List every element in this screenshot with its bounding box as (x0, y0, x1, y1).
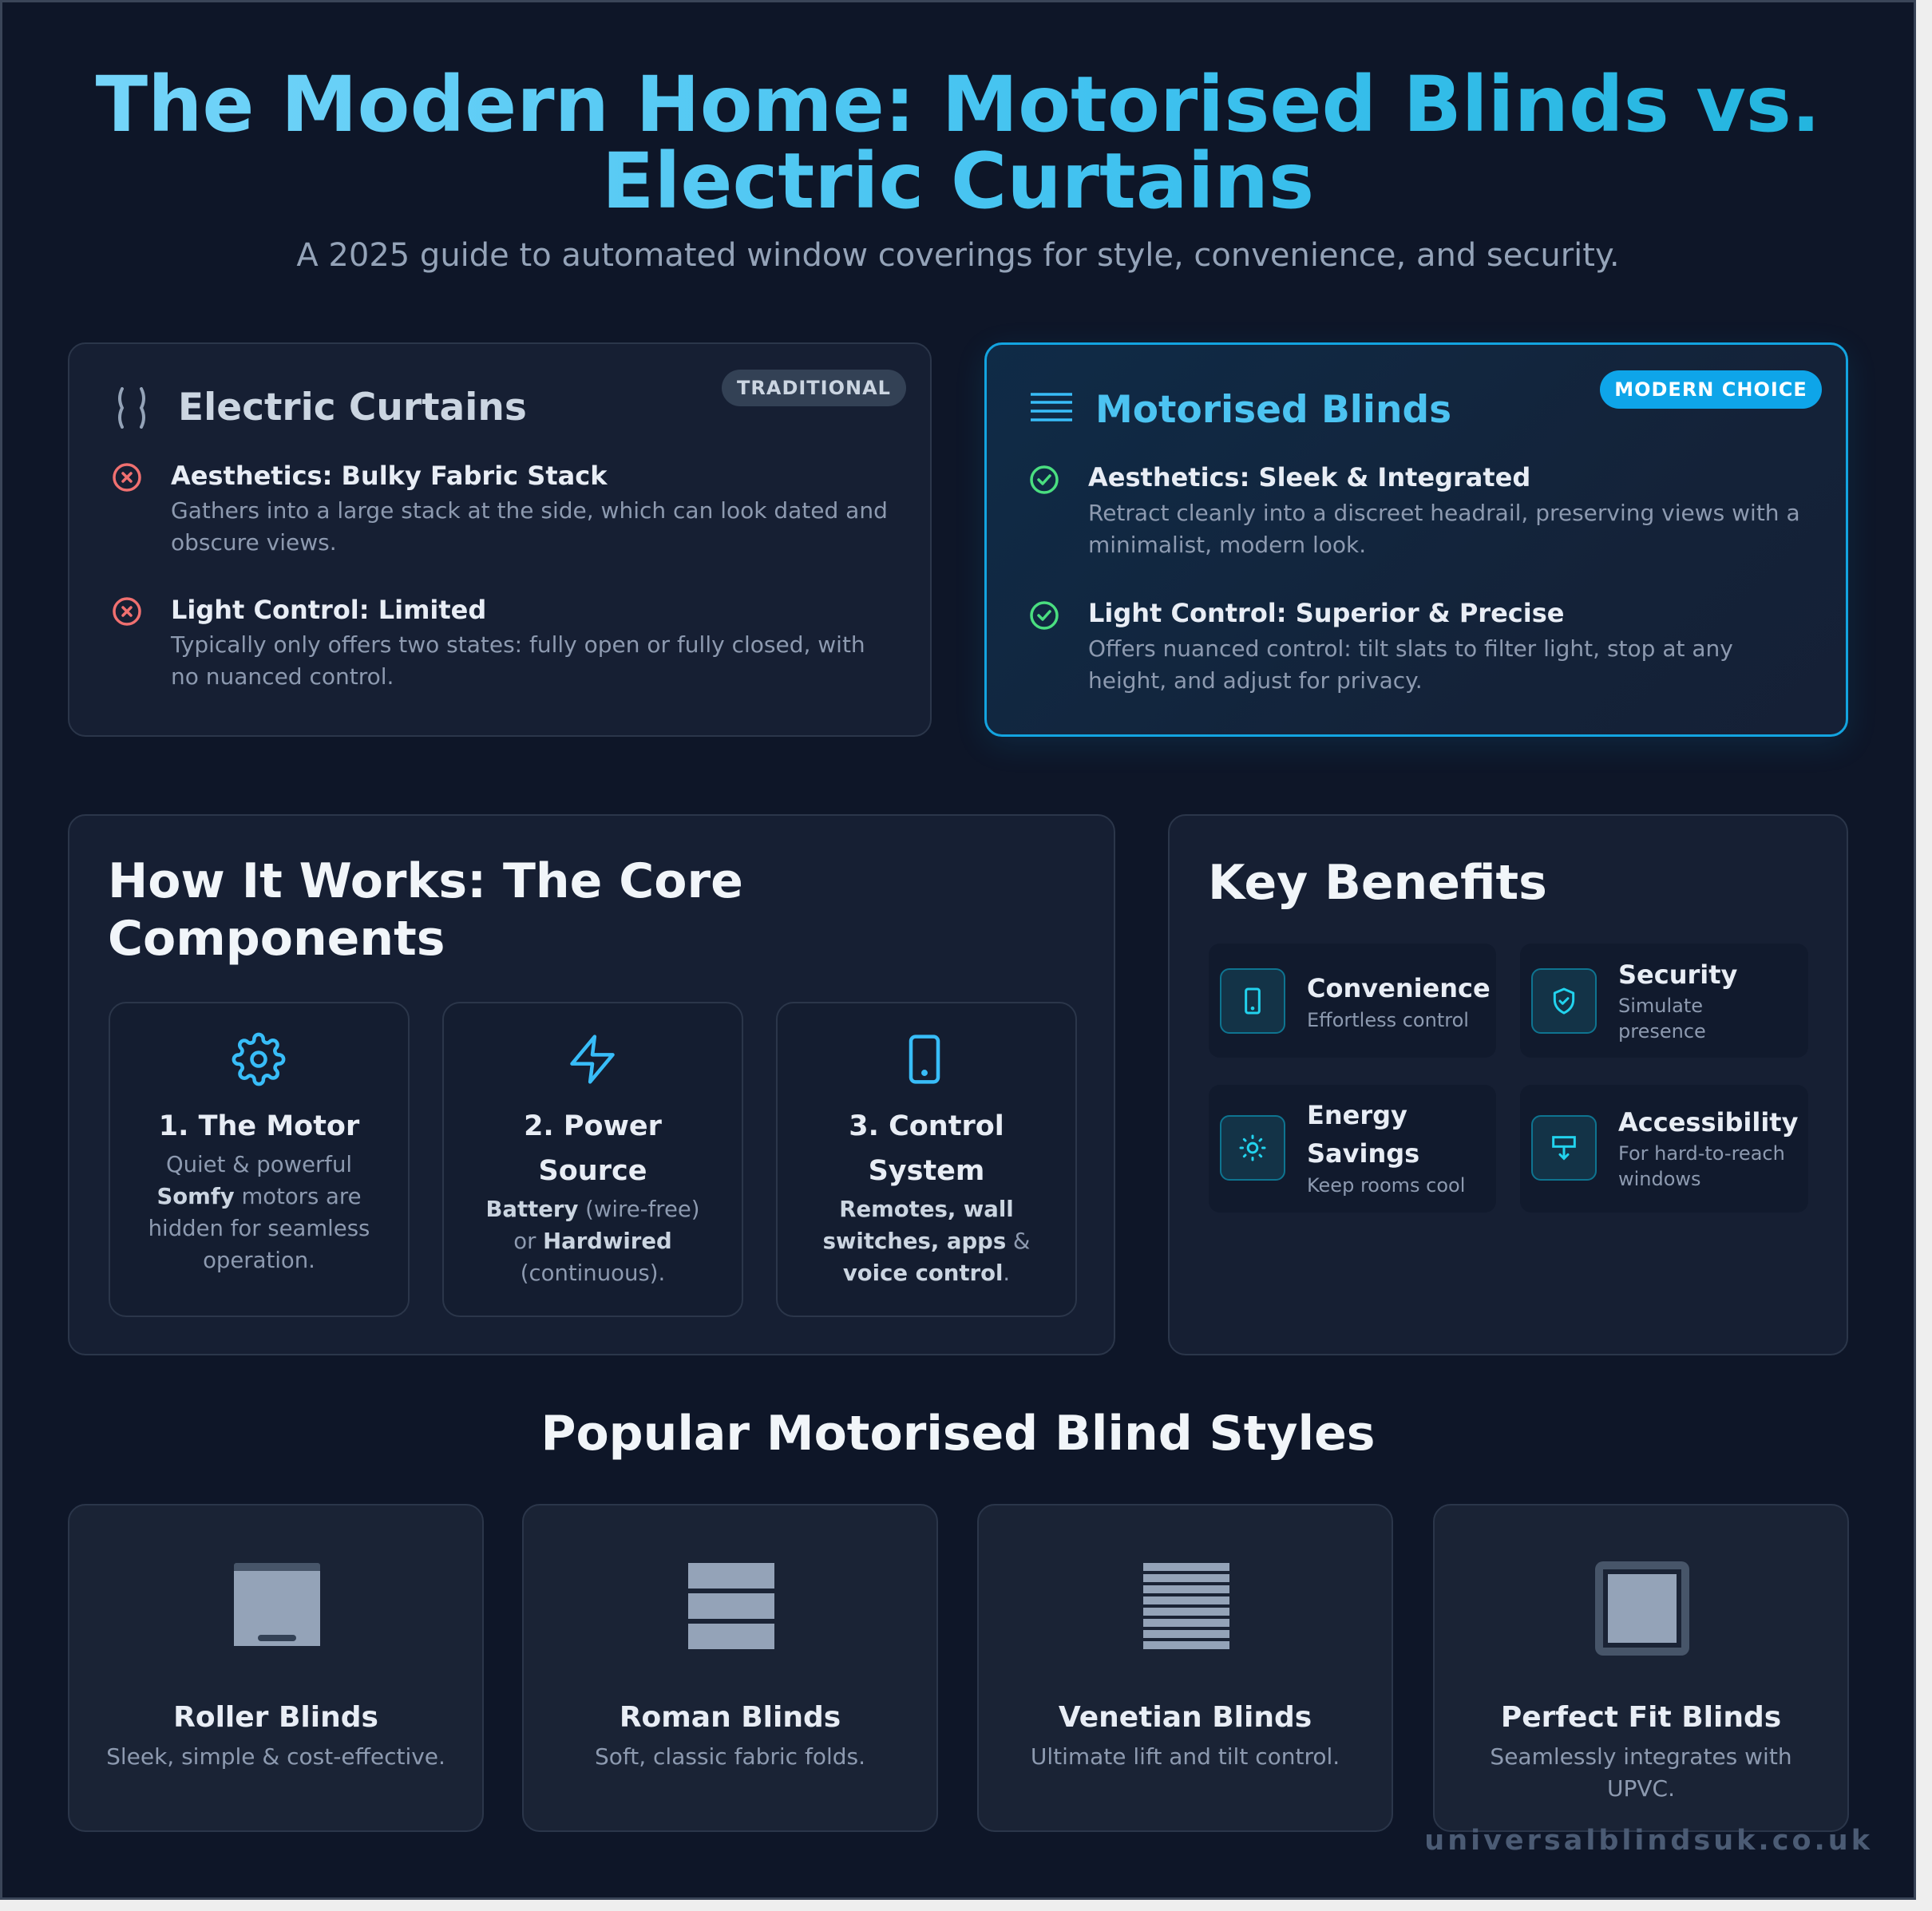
benefit: security: Security (1618, 959, 1737, 990)
badge: traditional: TRADITIONAL (737, 377, 891, 399)
item: light control: height, and adjust for privacy. (1088, 667, 1423, 694)
component: power: (continuous). (521, 1260, 665, 1286)
benefit: energy: Savings (1307, 1138, 1419, 1169)
benefit: accessibility: For hard-to-reach (1618, 1142, 1785, 1165)
style card: roman: Soft, classic fabric folds. (595, 1743, 865, 1770)
footer: website: universalblindsuk.co.uk (1424, 1825, 1873, 1857)
component: power: Source (539, 1155, 647, 1187)
item: aesthetics: Gathers into a large stack at the side, which can look dated and (171, 497, 888, 524)
component: control: Remotes, wall (839, 1197, 1014, 1222)
style card: venetian: Ultimate lift and tilt control. (1031, 1743, 1340, 1770)
benefit: convenience (1209, 944, 1496, 1058)
benefit: security: presence (1618, 1020, 1706, 1043)
component: motor: hidden for seamless (148, 1216, 370, 1241)
style card: roller: Sleek, simple & cost-effective. (106, 1743, 445, 1770)
benefit: energy (1209, 1085, 1496, 1213)
item: aesthetics: Aesthetics: Bulky Fabric Stack (171, 461, 607, 491)
style card: roman (522, 1504, 938, 1832)
item: aesthetics: obscure views. (171, 529, 337, 556)
component: control: voice control. (843, 1260, 1010, 1286)
style card: perfect fit (1433, 1504, 1849, 1832)
icon: gear (232, 1033, 286, 1086)
heading: Electric Curtains (178, 386, 527, 429)
benefit: energy: Energy (1307, 1100, 1407, 1130)
badge: modern choice: MODERN CHOICE (1614, 378, 1807, 401)
item: light control: Typically only offers two states: fully open or fully closed, with (171, 631, 865, 658)
icon: venetian blind (1143, 1563, 1229, 1649)
item: aesthetics: minimalist, modern look. (1088, 532, 1366, 558)
title: Electric Curtains (602, 136, 1314, 226)
item: light control (1030, 598, 1733, 694)
component: power: Battery (wire-free) (485, 1197, 700, 1222)
title: The Modern Home: Motorised Blinds vs. (96, 60, 1820, 149)
style card: venetian (977, 1504, 1393, 1832)
panel: how it works (68, 814, 1115, 1355)
panel: electric curtains (68, 342, 932, 737)
icon: roman blind (688, 1563, 774, 1649)
item: light control: Offers nuanced control: tilt slats to filter light, stop at any (1088, 635, 1733, 662)
badge: modern choice (1600, 370, 1822, 409)
benefit: security (1520, 944, 1808, 1058)
component: motor (109, 1002, 410, 1317)
component: control: 3. Control (849, 1110, 1004, 1142)
component: control (776, 1002, 1077, 1317)
component: power: or Hardwired (513, 1228, 672, 1254)
component: power: 2. Power (524, 1110, 662, 1142)
item: light control (113, 595, 865, 690)
heading: Key Benefits (1208, 855, 1547, 911)
heading: Motorised Blinds (1095, 388, 1451, 432)
subtitle: A 2025 guide to automated window coverings for style, convenience, and security. (296, 237, 1620, 274)
item: aesthetics (113, 461, 888, 556)
heading: Components (108, 911, 445, 967)
item: aesthetics: Aesthetics: Sleek & Integrated (1088, 462, 1530, 493)
benefit: accessibility: windows (1618, 1168, 1701, 1190)
icon: perfect fit blind (1595, 1561, 1689, 1656)
benefit: accessibility (1520, 1085, 1808, 1213)
style card: perfect fit: Perfect Fit Blinds (1501, 1701, 1781, 1734)
benefit: energy: Keep rooms cool (1307, 1174, 1465, 1197)
component: motor: Quiet & powerful (166, 1152, 352, 1177)
title (0, 66, 1916, 220)
benefit: security: Simulate (1618, 995, 1703, 1017)
icon: curtains (118, 387, 145, 429)
style card: roman: Roman Blinds (620, 1701, 841, 1734)
item: aesthetics: Retract cleanly into a discreet headrail, preserving views with a (1088, 500, 1800, 526)
heading (108, 853, 743, 967)
component: control: switches, apps & (823, 1228, 1030, 1254)
heading: popular styles: Popular Motorised Blind Styles (540, 1406, 1376, 1462)
benefit: convenience: Effortless control (1307, 1009, 1469, 1031)
icon: blinds lines (1031, 393, 1072, 421)
component: motor: 1. The Motor (159, 1110, 359, 1142)
item: light control: no nuanced control. (171, 663, 394, 690)
heading: How It Works: The Core (108, 853, 743, 909)
icon: tablet (909, 1035, 940, 1084)
style card: roller (68, 1504, 484, 1832)
icon: roller blind (234, 1563, 320, 1646)
style card: venetian: Venetian Blinds (1059, 1701, 1312, 1734)
style card: perfect fit: UPVC. (1607, 1775, 1675, 1802)
component: control: System (869, 1155, 984, 1187)
component: motor: operation. (203, 1248, 315, 1273)
icon: bolt (570, 1035, 615, 1084)
panel: key benefits (1168, 814, 1848, 1355)
component: motor: Somfy motors are (156, 1184, 362, 1209)
benefit: accessibility: Accessibility (1618, 1107, 1798, 1138)
item: aesthetics (1030, 462, 1800, 558)
style card: roller: Roller Blinds (173, 1701, 378, 1734)
style card: perfect fit: Seamlessly integrates with (1490, 1743, 1792, 1770)
item: light control: Light Control: Limited (171, 595, 486, 625)
benefit: convenience: Convenience (1307, 973, 1491, 1003)
item: light control: Light Control: Superior & Precise (1088, 598, 1564, 628)
badge: traditional (722, 370, 906, 406)
panel: motorised blinds (984, 342, 1848, 737)
component: power (442, 1002, 743, 1317)
